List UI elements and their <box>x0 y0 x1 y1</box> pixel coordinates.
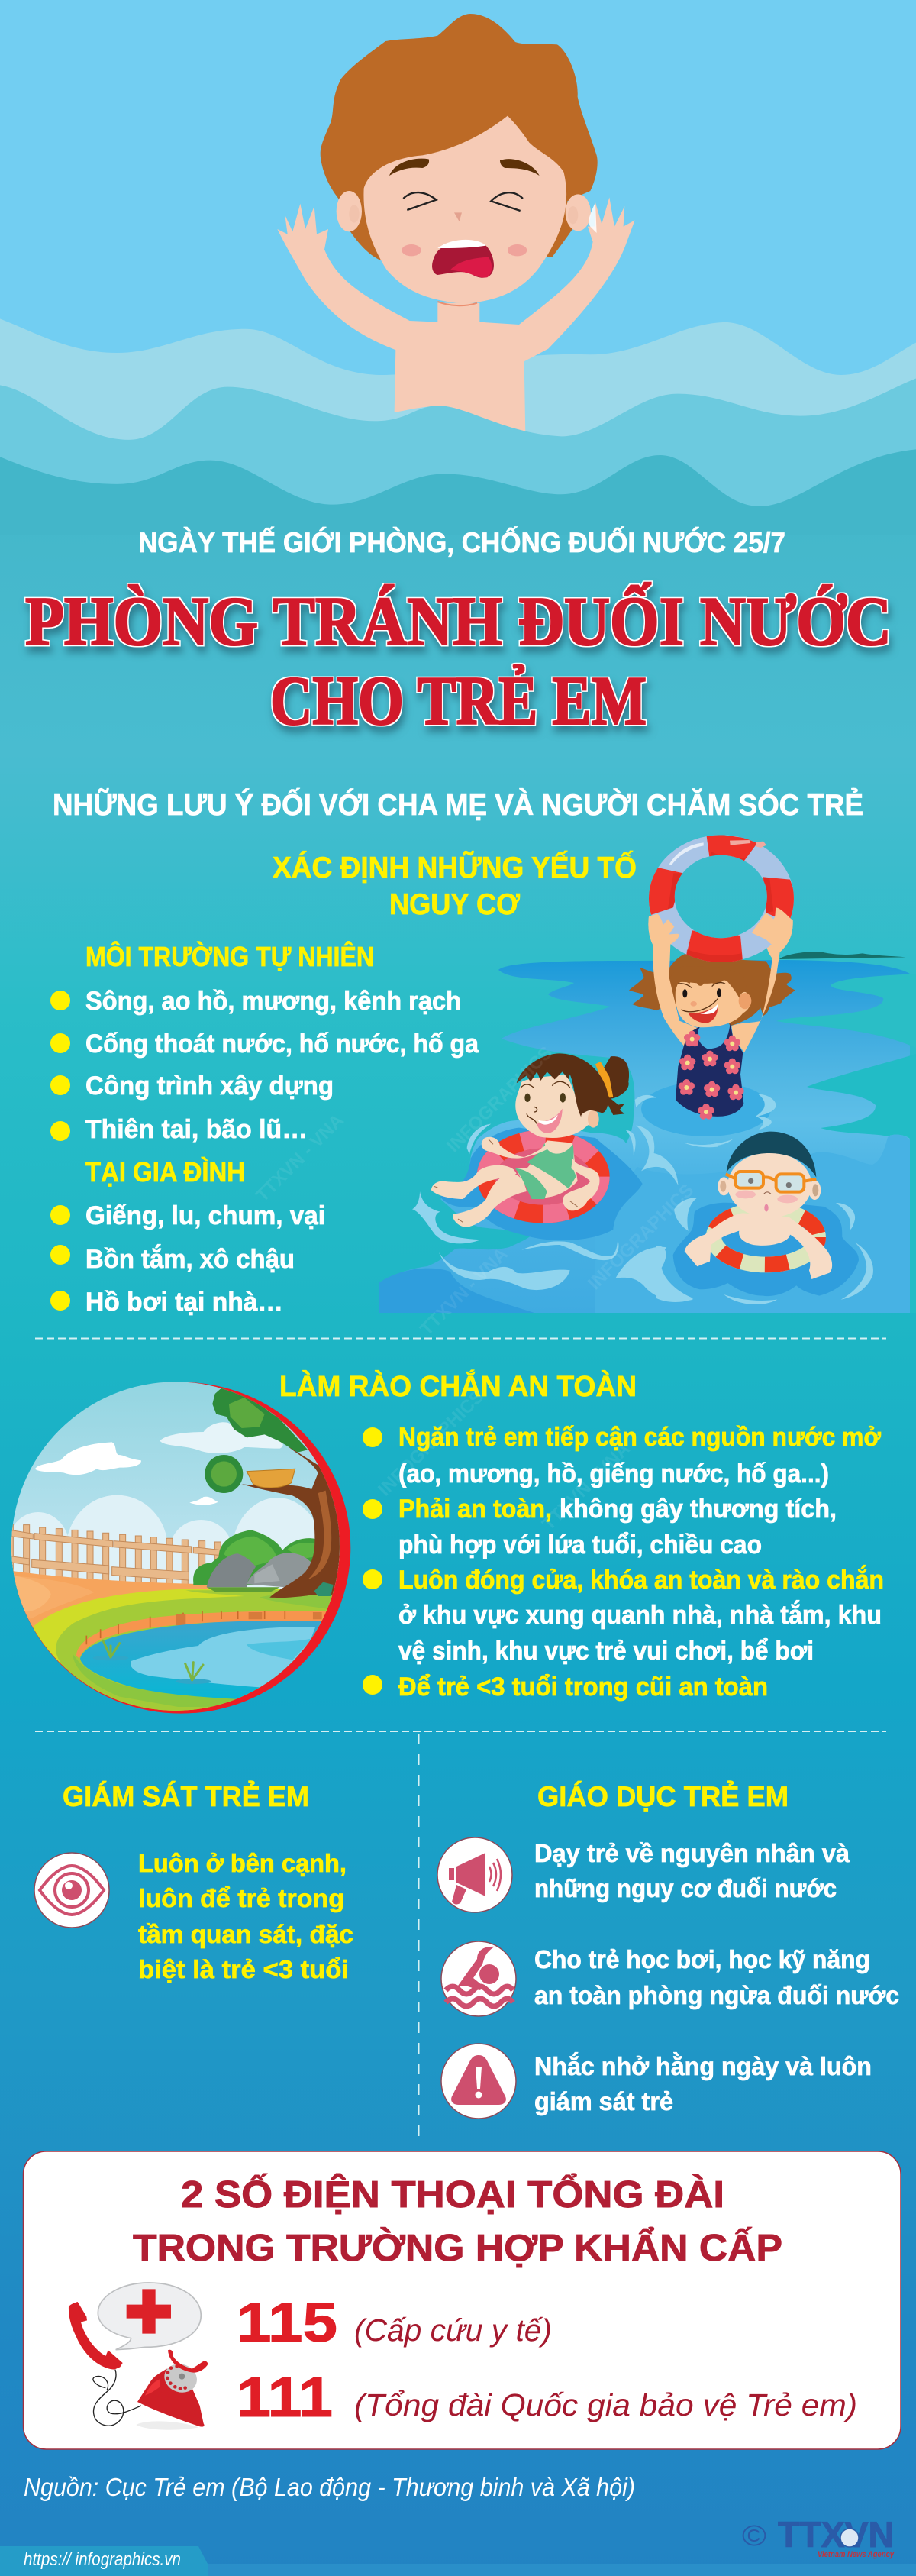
panel: educate children: GIÁO DỤC TRẺ EM <box>537 1781 789 1812</box>
list: natural environment risks <box>50 940 479 1144</box>
icon: telephone and medical speech bubble <box>69 2283 208 2430</box>
subtitle: NGÀY THẾ GIỚI PHÒNG, CHỐNG ĐUỐI NƯỚC 25/7 <box>138 526 785 558</box>
heading: risk factors: NGUY CƠ <box>389 888 521 921</box>
hero illustration: drowning child in waves <box>0 0 916 535</box>
watermarks <box>252 1042 698 1534</box>
hotline heading <box>133 2174 782 2269</box>
logo: TTXVN: TTXVN <box>778 2514 894 2555</box>
sky <box>0 0 916 474</box>
list: barrier requirements: phù hợp với lứa tuổi, chiều cao <box>398 1530 762 1559</box>
pool <box>80 1621 331 1702</box>
land <box>33 1589 334 1711</box>
list: natural environment risks: Cống thoát nước, hố nước, hố ga <box>85 1029 479 1059</box>
child <box>277 14 635 434</box>
panel: supervise children: biệt là trẻ <3 tuổi <box>138 1955 349 1983</box>
light wave strokes <box>412 1095 718 1301</box>
section heading: NHỮNG LƯU Ý ĐỐI VỚI CHA MẸ VÀ NGƯỜI CHĂM SÓC TRẺ <box>53 787 863 822</box>
wave: back <box>0 318 916 535</box>
logo: TTXVN: © <box>742 2520 766 2552</box>
icon: swimmer <box>441 1941 516 2016</box>
source: Nguồn: Cục Trẻ em (Bộ Lao động - Thương binh và Xã hội) <box>24 2473 635 2501</box>
illustration: pond, fence and tree <box>11 1382 351 1714</box>
list: natural environment risks: Sông, ao hồ, mương, kênh rạch <box>85 987 461 1016</box>
list: natural environment risks: MÔI TRƯỜNG TỰ NHIÊN <box>85 940 374 972</box>
footer strip <box>0 2564 916 2576</box>
panel: supervise children <box>34 1781 353 1983</box>
orange ground <box>10 1571 208 1628</box>
ponds <box>641 1081 771 1136</box>
tree <box>242 1446 341 1598</box>
wave: front <box>0 449 916 535</box>
teal bays <box>776 974 916 1048</box>
hotline 111: (Tổng đài Quốc gia bảo vệ Trẻ em) <box>354 2387 857 2422</box>
island <box>780 952 906 959</box>
hotline heading: 2 SỐ ĐIỆN THOẠI TỔNG ĐÀI <box>181 2174 724 2216</box>
list: barrier requirements: (ao, mương, hồ, giếng nước, hố ga...) <box>398 1459 829 1488</box>
list: barrier requirements: Ngăn trẻ em tiếp cận các nguồn nước mở <box>398 1423 882 1452</box>
panel: supervise children: GIÁM SÁT TRẺ EM <box>63 1781 309 1812</box>
rocks <box>207 1553 256 1587</box>
list: natural environment risks: Công trình xây dựng <box>85 1071 334 1101</box>
hotline 111 <box>237 2367 857 2429</box>
watermarks: TTXVN - VNA <box>538 1439 634 1534</box>
nest <box>247 1469 295 1488</box>
list: household risks: Bồn tắm, xô chậu <box>85 1245 295 1274</box>
main title <box>25 582 892 739</box>
hotline 111: 111 <box>237 2367 333 2429</box>
icon: eye <box>34 1853 109 1928</box>
heading: risk factors <box>273 850 637 921</box>
watermarks: TTXVN - VNA <box>416 1244 512 1340</box>
hotline heading: TRONG TRƯỜNG HỢP KHẨN CẤP <box>133 2227 782 2269</box>
fence <box>10 1524 221 1587</box>
heading: risk factors: XÁC ĐỊNH NHỮNG YẾU TỐ <box>273 850 637 884</box>
watermarks: INFOGRAPHICS <box>443 1042 556 1156</box>
plant near tree <box>314 1582 334 1596</box>
foliage <box>212 1388 308 1453</box>
panel: educate children: Nhắc nhở hằng ngày và luôn <box>534 2052 872 2080</box>
list: household risks: Hồ bơi tại nhà… <box>85 1288 283 1317</box>
list: barrier requirements: không gây thương tích, <box>560 1495 837 1524</box>
panel: supervise children: luôn để trẻ trong <box>138 1884 344 1912</box>
website tab <box>0 2546 208 2576</box>
hotline 115: (Cấp cứu y tế) <box>354 2313 552 2348</box>
bushes <box>193 1530 315 1585</box>
panel: supervise children: Luôn ở bên cạnh, <box>138 1849 347 1877</box>
list: natural environment risks: Thiên tai, bão lũ… <box>85 1115 308 1144</box>
panel: educate children: Dạy trẻ về nguyên nhân và <box>534 1839 850 1867</box>
child: girl with lifebuoy <box>629 832 799 1120</box>
panel: educate children: những nguy cơ đuối nước <box>534 1874 837 1902</box>
lower water band <box>595 1134 910 1313</box>
panel: educate children: giám sát trẻ <box>534 2087 673 2115</box>
grass tufts <box>103 1640 203 1680</box>
back clouds <box>11 1495 340 1605</box>
wave: middle <box>0 379 916 535</box>
list: barrier requirements: Phải an toàn, <box>398 1495 552 1524</box>
panel: emergency hotlines <box>23 2151 901 2449</box>
list: household risks: Giếng, lu, chum, vại <box>85 1201 325 1230</box>
icon: warning <box>441 2044 516 2119</box>
hotline 115: 115 <box>237 2292 337 2354</box>
list: barrier requirements: Để trẻ <3 tuổi trong cũi an toàn <box>398 1673 768 1702</box>
child: girl in pink ring <box>431 1053 629 1227</box>
hotline 115 <box>237 2292 552 2354</box>
website tab: https:// infographics.vn <box>24 2549 181 2570</box>
child: boy with goggles <box>685 1132 832 1279</box>
list: barrier requirements: vệ sinh, khu vực trẻ vui chơi, bể bơi <box>398 1637 814 1666</box>
list: barrier requirements: Luôn đóng cửa, khóa an toàn và rào chắn <box>398 1566 884 1595</box>
heading: safe barrier: LÀM RÀO CHẮN AN TOÀN <box>279 1369 637 1403</box>
panel: educate children: an toàn phòng ngừa đuối nước <box>534 1981 899 2009</box>
watermarks: TTXVN - VNA <box>252 1110 348 1206</box>
water <box>379 960 910 1313</box>
main title: CHO TRẺ EM <box>270 662 647 739</box>
watermarks: INFOGRAPHICS <box>374 1386 488 1500</box>
panel: educate children: Cho trẻ học bơi, học kỹ năng <box>534 1945 870 1973</box>
icon: megaphone <box>437 1837 512 1912</box>
panel: educate children <box>437 1781 899 2119</box>
logo: TTXVN: Vietnam News Agency <box>818 2550 895 2559</box>
list: barrier requirements: ở khu vực xung quanh nhà, nhà tắm, khu <box>398 1601 882 1630</box>
logo: TTXVN <box>742 2514 895 2559</box>
watermarks: INFOGRAPHICS <box>584 1180 698 1294</box>
illustration: children swimming <box>379 832 916 1313</box>
list: household risks: TẠI GIA ĐÌNH <box>85 1156 245 1188</box>
list: barrier requirements <box>363 1423 884 1702</box>
panel: supervise children: tầm quan sát, đặc <box>138 1920 353 1948</box>
bank <box>76 1611 331 1659</box>
list: household risks <box>50 1156 325 1317</box>
dark pond lower left <box>379 1269 534 1313</box>
